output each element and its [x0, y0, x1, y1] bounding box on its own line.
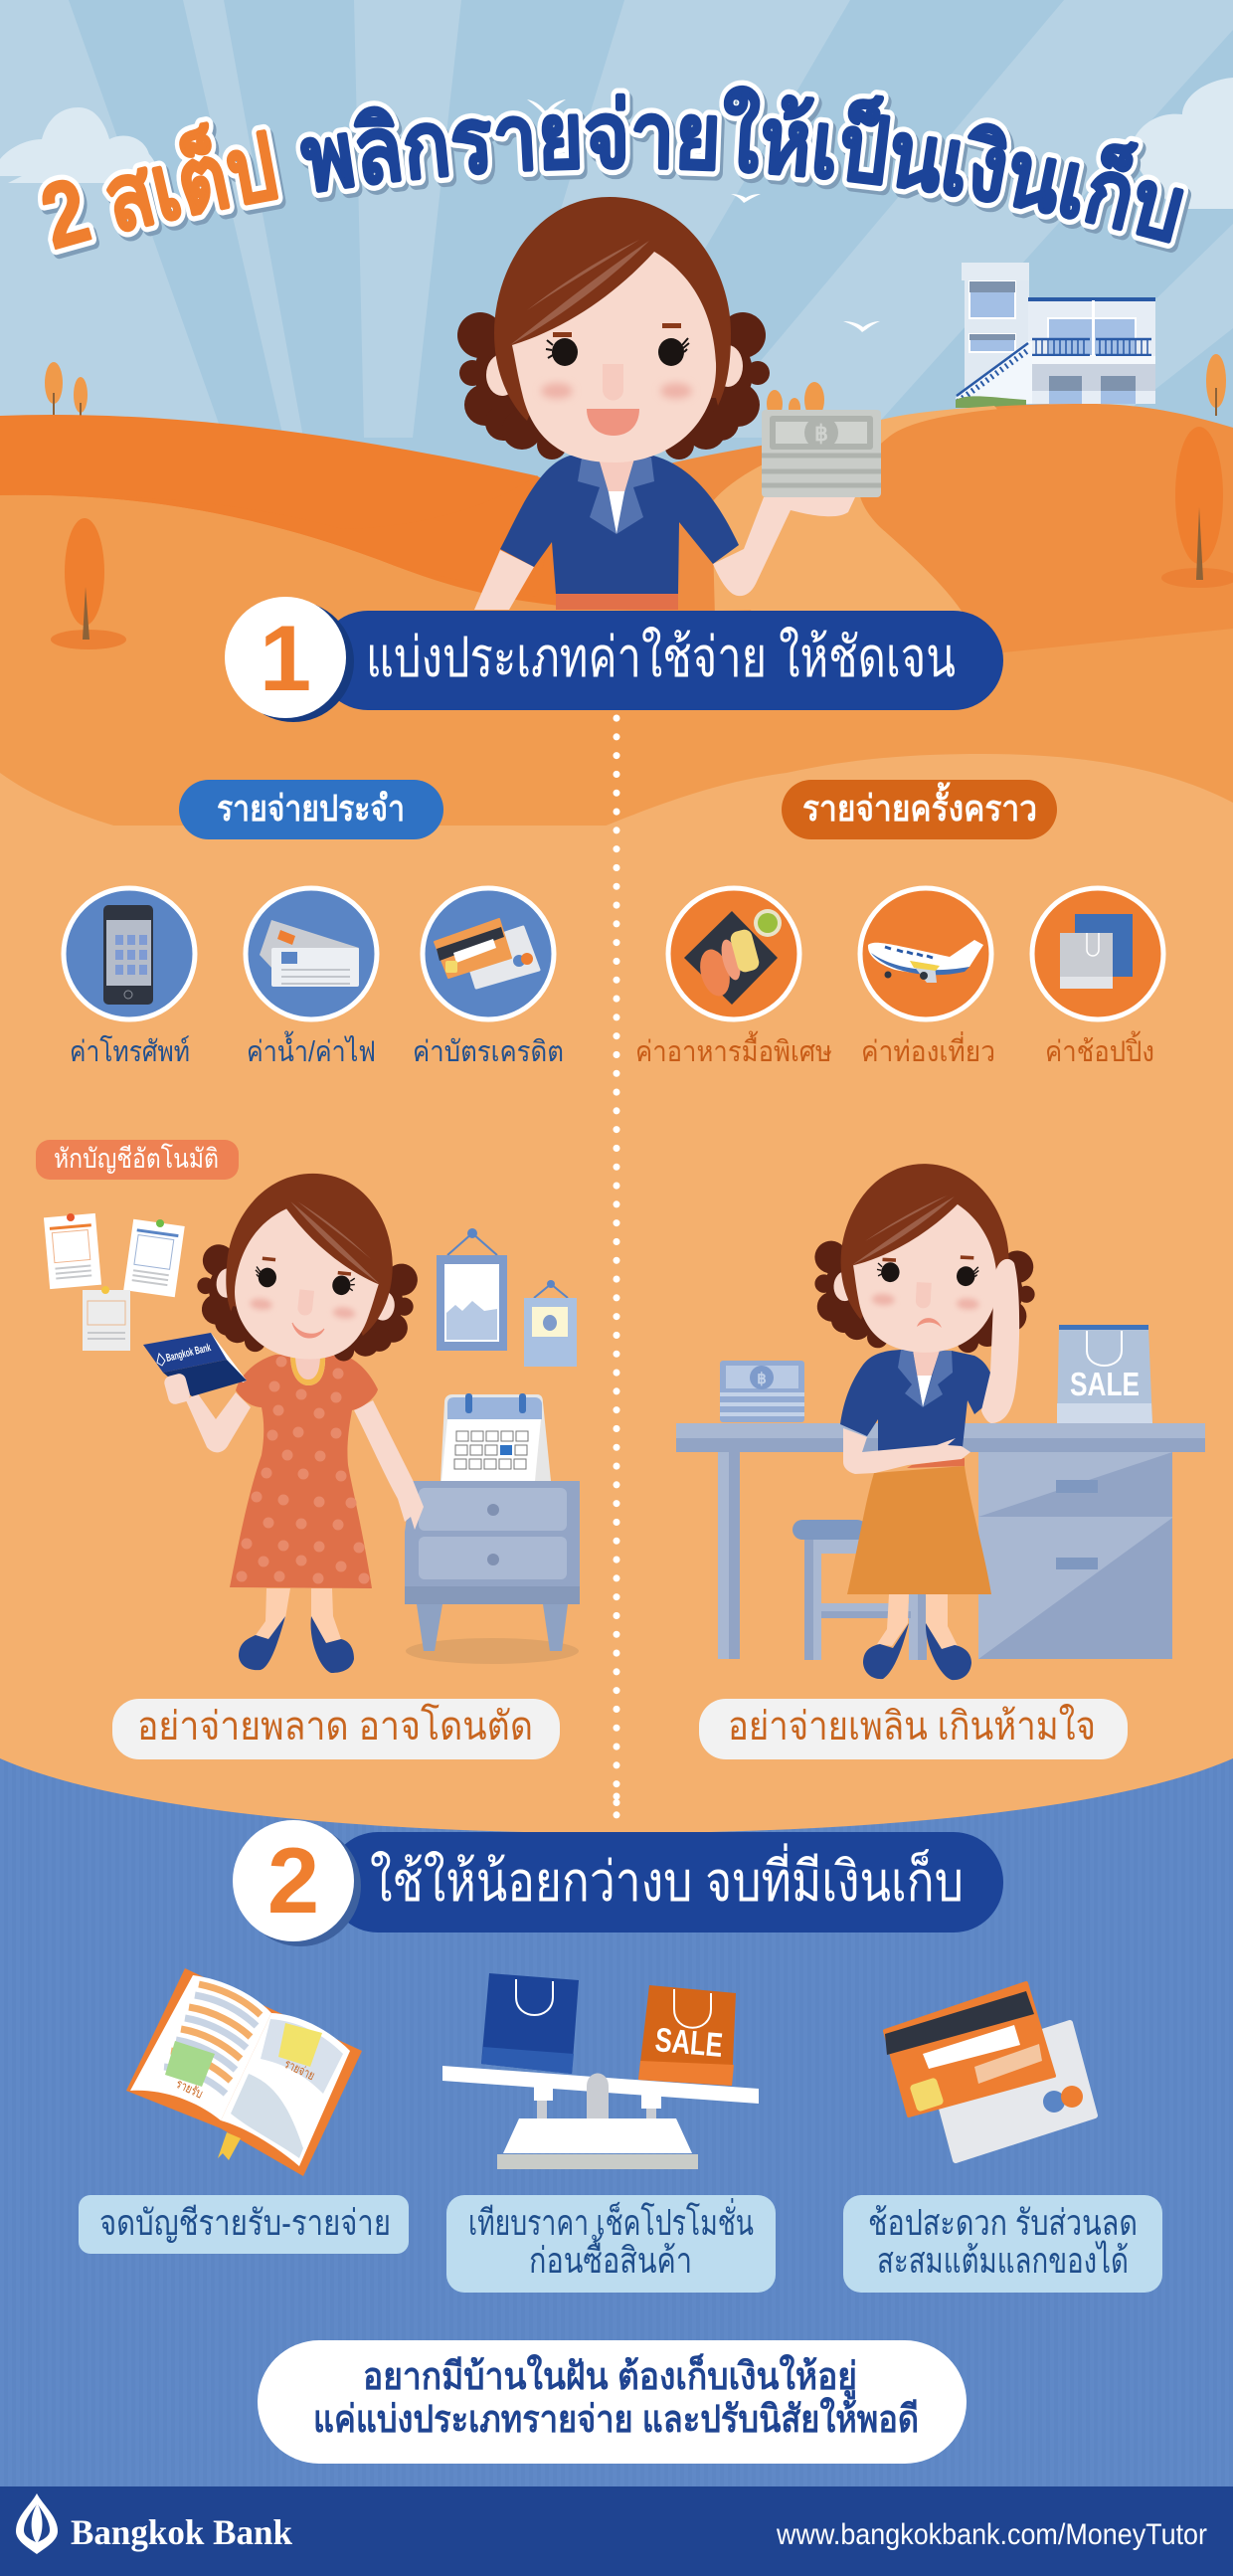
pinned bills: [44, 1213, 185, 1351]
icon: bills: [246, 888, 377, 1019]
tag: automatic debit: หักบัญชีอัตโนมัติ: [54, 1144, 219, 1174]
big trees: [51, 427, 1233, 649]
caption: record accounts: จดบัญชีรายรับ-รายจ่าย: [99, 2202, 391, 2243]
closing message: แค่แบ่งประเภทรายจ่าย และปรับนิสัยให้พอดี: [313, 2397, 919, 2441]
house: [956, 263, 1155, 408]
title: 2 สเต็ป: [42, 121, 286, 259]
icon: account book: รายจ่าย: [282, 2056, 317, 2083]
closing message: อยากมีบ้านในฝัน ต้องเก็บเงินให้อยู่: [363, 2353, 857, 2400]
worried woman: [810, 1159, 1041, 1680]
icon: airplane: [860, 888, 991, 1019]
closing message: [258, 2340, 967, 2464]
section 2 banner: [233, 1820, 1003, 1946]
footer: Bangkok Bank: [71, 2512, 292, 2552]
distant small trees: [45, 354, 1226, 421]
icon labels: regular: [70, 1030, 564, 1068]
icon: account book: [126, 1968, 362, 2176]
caption: shop conveniently: ช้อปสะดวก รับส่วนลด: [868, 2202, 1138, 2243]
icon: scale with bags: SALE: [653, 2021, 724, 2065]
sale bag: SALE: [1070, 1366, 1140, 1402]
caption left: [112, 1699, 560, 1759]
footer: [0, 2486, 1233, 2576]
bird behind title: [527, 99, 566, 117]
birds: [731, 194, 880, 332]
caption: compare prices: เทียบราคา เช็คโปรโมชั่น: [468, 2198, 754, 2243]
sky background: [0, 0, 1233, 617]
section 1 banner: [225, 597, 1003, 722]
caption: compare prices: [446, 2195, 776, 2293]
section 2 banner: 2: [267, 1828, 319, 1932]
title: พลิกรายจ่ายให้เป็นเงินเก็บ: [296, 80, 1189, 249]
icon: sushi: [668, 888, 799, 1019]
section 1 banner: แบ่งประเภทค่าใช้จ่าย ให้ชัดเจน: [366, 626, 956, 688]
tag: automatic debit: [36, 1140, 239, 1180]
label: regular expenses: [179, 780, 443, 839]
label: regular expenses: รายจ่ายประจำ: [217, 788, 405, 828]
dotted divider: [613, 718, 620, 1820]
caption right: [699, 1699, 1128, 1759]
woman with dress: [186, 1163, 428, 1673]
office desk: [676, 1423, 1205, 1659]
icon labels: occasional: ค่าท่องเที่ยว: [861, 1031, 995, 1068]
money stack: [762, 410, 881, 497]
title: พลิกรายจ่ายให้เป็นเงินเก็บ: [301, 92, 1191, 253]
nightstand: [405, 1481, 580, 1664]
icon: loyalty cards: [885, 1983, 1095, 2160]
sale bag: [1057, 1325, 1152, 1423]
wall picture large: [437, 1228, 507, 1351]
caption: record accounts: [79, 2195, 409, 2254]
icon: shopping bags: [1032, 888, 1163, 1019]
money stack: ฿: [814, 421, 828, 446]
wall picture small: [524, 1280, 577, 1367]
title: 2 สเต็ป: [42, 121, 278, 250]
label: occasional expenses: รายจ่ายครั้งคราว: [802, 782, 1037, 828]
icon: telephone: [64, 888, 195, 1019]
icon labels: regular: ค่าบัตรเครดิต: [413, 1036, 564, 1068]
bankbook: Bangkok Bank: [165, 1342, 213, 1365]
caption left: อย่าจ่ายพลาด อาจโดนตัด: [137, 1704, 533, 1748]
label: occasional expenses: [782, 780, 1057, 839]
icon labels: occasional: ค่าช้อปปิ้ง: [1045, 1030, 1154, 1068]
caption: compare prices: ก่อนซื้อสินค้า: [529, 2234, 692, 2281]
icon labels: regular: ค่าโทรศัพท์: [70, 1034, 190, 1068]
blue section background: [0, 1758, 1233, 2486]
section 1 banner: 1: [260, 606, 311, 710]
money on desk: ฿: [757, 1371, 767, 1387]
dotted divider lower: [613, 1796, 620, 1820]
icon labels: occasional: [635, 1030, 1154, 1068]
icon: account book: รายรับ: [174, 2076, 205, 2102]
icon: credit cards: [423, 888, 554, 1019]
caption: shop conveniently: สะสมแต้มแลกของได้: [877, 2240, 1129, 2281]
calendar: [440, 1393, 551, 1481]
clouds: [0, 78, 1233, 209]
title: พลิกรายจ่ายให้เป็นเงินเก็บ: [300, 86, 1183, 244]
icon labels: occasional: ค่าอาหารมื้อพิเศษ: [635, 1030, 832, 1068]
money on desk: [720, 1361, 804, 1422]
caption right: อย่าจ่ายเพลิน เกินห้ามใจ: [728, 1703, 1096, 1748]
hills: [0, 404, 1233, 1790]
title: 2 สเต็ป: [38, 116, 282, 255]
bankbook: [143, 1333, 247, 1405]
section 2 banner: ใช้ให้น้อยกว่างบ จบที่มีเงินเก็บ: [370, 1843, 964, 1913]
caption: shop conveniently: [843, 2195, 1162, 2293]
stool: [793, 1520, 927, 1660]
main character: [457, 197, 855, 610]
icon: scale with bags: [442, 1973, 759, 2169]
icon labels: regular: ค่าน้ำ/ค่าไฟ: [247, 1030, 376, 1068]
